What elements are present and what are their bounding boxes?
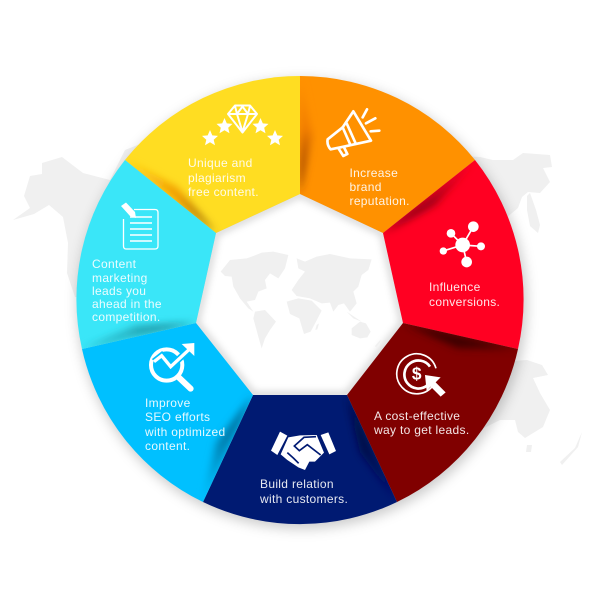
- text: cost-effective leads: way to get leads.: [373, 423, 470, 437]
- panel: influence conversions (red): [383, 160, 524, 349]
- text: competition: marketing: [92, 271, 148, 285]
- text: customer relations: with customers.: [259, 492, 348, 506]
- panel: customer relations (navy): [203, 395, 397, 524]
- text: influence conversions: conversions.: [429, 295, 500, 309]
- panel: unique content (yellow): [125, 76, 300, 233]
- text: SEO: SEO efforts: [145, 410, 210, 424]
- text: competition: Content: [92, 257, 137, 271]
- icon: document with pencil: [121, 202, 158, 249]
- centre world map: [221, 252, 381, 348]
- text: competition: leads you: [92, 284, 146, 298]
- text: competition: competition.: [92, 310, 161, 324]
- panel: brand reputation (orange): [300, 76, 475, 233]
- text: brand reputation: reputation.: [350, 194, 410, 208]
- icon: network nodes: [440, 221, 485, 267]
- text: brand reputation: Increase: [350, 166, 398, 180]
- panel: SEO (blue): [82, 323, 253, 502]
- text: brand reputation: brand: [350, 180, 382, 194]
- icon: diamond and stars: [202, 106, 283, 145]
- text: unique content: Unique and: [188, 156, 253, 170]
- text: unique content: plagiarism: [188, 171, 246, 185]
- text: SEO: with optimized: [144, 425, 226, 439]
- text: customer relations: Build relation: [260, 477, 334, 491]
- panel: cost-effective leads (dark red): [347, 323, 518, 502]
- background world map: [13, 140, 587, 465]
- icon: dollar target with cursor: [397, 354, 446, 397]
- ring drop shadow: [77, 79, 527, 529]
- icon: megaphone: [327, 109, 379, 156]
- text: SEO: content.: [145, 439, 190, 453]
- text: competition: ahead in the: [92, 297, 162, 311]
- icon: handshake: [271, 432, 336, 470]
- text: influence conversions: Influence: [429, 280, 481, 294]
- text: unique content: free content.: [188, 185, 259, 199]
- text: cost-effective leads: A cost-effective: [374, 409, 460, 423]
- text: SEO: Improve: [145, 396, 191, 410]
- icon: dollar target with cursor: $: [412, 364, 422, 384]
- icon: magnifier with growth arrow: [151, 343, 194, 389]
- panel: competition (cyan): [76, 160, 216, 349]
- centre white panel: [196, 194, 403, 395]
